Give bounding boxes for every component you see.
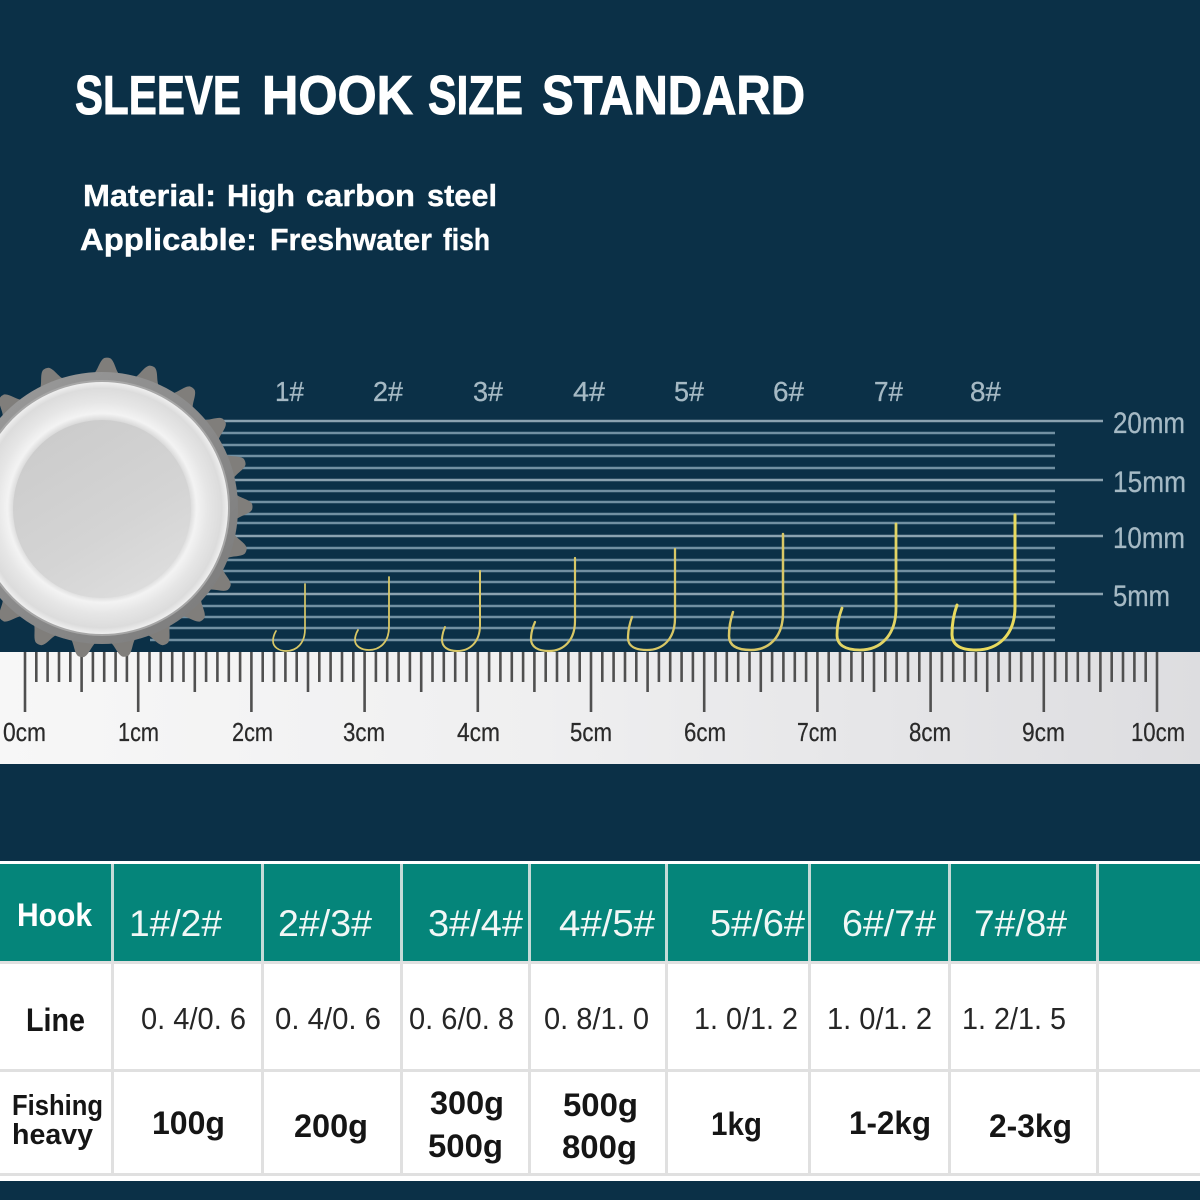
line row: 0. 8/1. 0 [544, 1001, 649, 1036]
text block: specifications: Material: [83, 178, 216, 213]
line row: 0. 6/0. 8 [409, 1001, 514, 1036]
title: SLEEVE [75, 64, 241, 126]
hook 4# [531, 558, 575, 651]
hook 2# [355, 577, 389, 650]
hook size labels: 2# [373, 376, 403, 407]
ruler: 10cm [1131, 717, 1185, 747]
ruler: 7cm [797, 717, 837, 747]
fishing heavy row: 200g [294, 1108, 368, 1144]
hooks 1# to 8# [273, 515, 1015, 651]
grid lines [150, 421, 1103, 640]
ruler: 4cm [457, 717, 500, 747]
table header row: 1#/2# [129, 903, 222, 944]
millimetre scale labels [1113, 407, 1186, 613]
fishing heavy row: heavy [12, 1119, 93, 1151]
line row: 1. 0/1. 2 [827, 1001, 932, 1036]
ruler [0, 652, 1200, 764]
fishing heavy row: 800g [562, 1129, 637, 1165]
hook size labels: 8# [970, 376, 1001, 407]
bottle cap size reference [0, 357, 253, 659]
hook 1# [273, 584, 305, 651]
hook 8# [952, 515, 1015, 650]
fishing heavy row: 1kg [711, 1106, 762, 1142]
text block: specifications: steel [427, 178, 497, 213]
ruler: 1cm [118, 717, 159, 747]
hook 7# [837, 524, 896, 650]
fishing heavy row [12, 1085, 1072, 1165]
table header row: 3#/4# [428, 903, 523, 944]
hook 6# [729, 534, 783, 650]
title: HOOK [262, 64, 413, 126]
table [0, 861, 1200, 1181]
ruler: 6cm [684, 717, 726, 747]
ruler: 5cm [570, 717, 612, 747]
line row: 1. 0/1. 2 [694, 1001, 798, 1036]
ruler: 9cm [1022, 717, 1065, 747]
millimetre scale labels: 20mm [1113, 407, 1185, 440]
hook size labels: 4# [573, 376, 605, 407]
hook size labels: 1# [275, 376, 304, 407]
fishing heavy row: 2-3kg [989, 1108, 1072, 1144]
table header row: 6#/7# [842, 903, 936, 944]
text block: specifications: Applicable: [80, 222, 257, 257]
table header row: 5#/6# [710, 903, 805, 944]
table header row: 7#/8# [974, 903, 1067, 944]
millimetre scale labels: 15mm [1113, 466, 1186, 499]
table header row: 4#/5# [559, 903, 655, 944]
table header row [0, 864, 1200, 961]
ruler: 0cm [3, 717, 46, 747]
title [75, 64, 805, 126]
ruler: 8cm [909, 717, 951, 747]
table header row: 2#/3# [278, 903, 372, 944]
ruler: 3cm [343, 717, 385, 747]
hook size labels: 7# [874, 376, 903, 407]
text block: specifications: High [227, 178, 295, 213]
table header row: Hook [17, 897, 92, 933]
title: SIZE [428, 64, 523, 126]
millimetre scale labels: 5mm [1113, 580, 1170, 613]
hook size labels: 5# [674, 376, 704, 407]
millimetre scale labels: 10mm [1113, 522, 1185, 555]
hook size labels [275, 376, 1001, 407]
hook size labels: 3# [473, 376, 503, 407]
fishing heavy row: 100g [152, 1105, 225, 1141]
fishing heavy row: 500g [428, 1128, 503, 1164]
fishing heavy row: 500g [563, 1087, 638, 1123]
text block: specifications: carbon [306, 178, 415, 213]
fishing heavy row: Fishing [12, 1090, 103, 1122]
line row [26, 1001, 1066, 1038]
hook 3# [442, 571, 480, 651]
line row: 1. 2/1. 5 [962, 1001, 1066, 1036]
hook 5# [628, 549, 675, 650]
line row: Line [26, 1002, 85, 1038]
line row: 0. 4/0. 6 [141, 1001, 246, 1036]
fishing heavy row: 300g [430, 1085, 504, 1121]
table grid [0, 864, 1200, 1176]
ruler: 2cm [232, 717, 273, 747]
line row: 0. 4/0. 6 [275, 1001, 381, 1036]
hook size labels: 6# [773, 376, 804, 407]
text block: specifications: Freshwater [270, 222, 432, 257]
text block: specifications [80, 178, 497, 257]
text block: specifications: fish [443, 222, 490, 257]
fishing heavy row: 1-2kg [849, 1105, 931, 1141]
title: STANDARD [542, 64, 805, 126]
